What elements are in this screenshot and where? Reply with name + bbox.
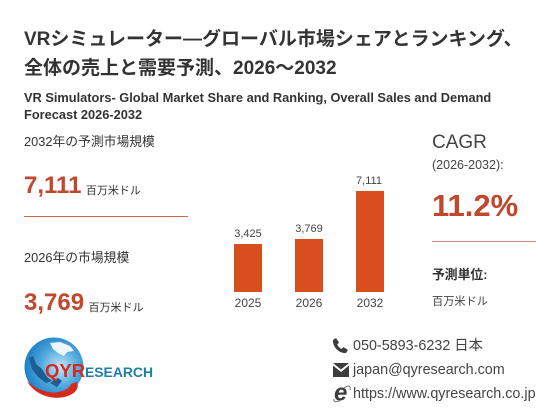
label: forecast unit heading: 予測単位:	[432, 267, 487, 282]
logo: QYResearch	[24, 338, 153, 398]
label: 2026 market size: 2026年の市場規模	[24, 250, 129, 265]
stat: CAGR value: 11.2%	[432, 188, 518, 223]
bar 2032	[356, 191, 384, 292]
subtitle: English heading	[24, 90, 491, 122]
value label 2025: 3,425	[234, 228, 262, 240]
bar chart	[234, 175, 384, 310]
divider: right	[432, 241, 536, 242]
globe	[24, 338, 84, 398]
stat: 2026 value: 3,769 百万米ドル	[24, 289, 144, 316]
label: 2032 forecast market size: 2032年の予測市場規模	[24, 134, 155, 149]
year label 2026: 2026	[296, 296, 322, 310]
label: forecast unit value: 百万米ドル	[432, 296, 488, 308]
year label 2025: 2025	[235, 296, 261, 310]
title: Japanese heading: 全体の売上と需要予測、2026～2032	[24, 58, 337, 79]
divider: left upper	[24, 216, 188, 217]
label: CAGR: CAGR	[432, 132, 487, 153]
title: Japanese heading: VRシミュレーター—グローバル市場シェアとランキング、	[24, 29, 523, 50]
text: website: https://www.qyresearch.co.jp	[353, 386, 536, 402]
label: CAGR period: (2026-2032):	[432, 158, 504, 172]
year label 2032: 2032	[357, 296, 383, 310]
text: email address: japan@qyresearch.com	[353, 362, 505, 378]
bar 2025	[234, 244, 262, 292]
value label 2026: 3,769	[295, 223, 323, 235]
value label 2032: 7,111	[356, 175, 382, 187]
icon: email	[333, 363, 349, 377]
title: Japanese heading	[24, 28, 523, 79]
icon: phone	[333, 338, 348, 353]
stat: 2032 value: 7,111 百万米ドル	[24, 172, 141, 199]
text: phone number: 050-5893-6232 日本	[353, 338, 483, 354]
bar 2026	[295, 239, 323, 292]
logo wordmark ESEARCH: ESEARCH	[85, 365, 153, 380]
subtitle: English heading: VR Simulators- Global Market Share and Ranking, Overall Sales and Demand	[24, 90, 491, 105]
subtitle: English heading: Forecast 2026-2032	[24, 107, 142, 122]
logo wordmark QYR: QYR	[45, 360, 85, 381]
